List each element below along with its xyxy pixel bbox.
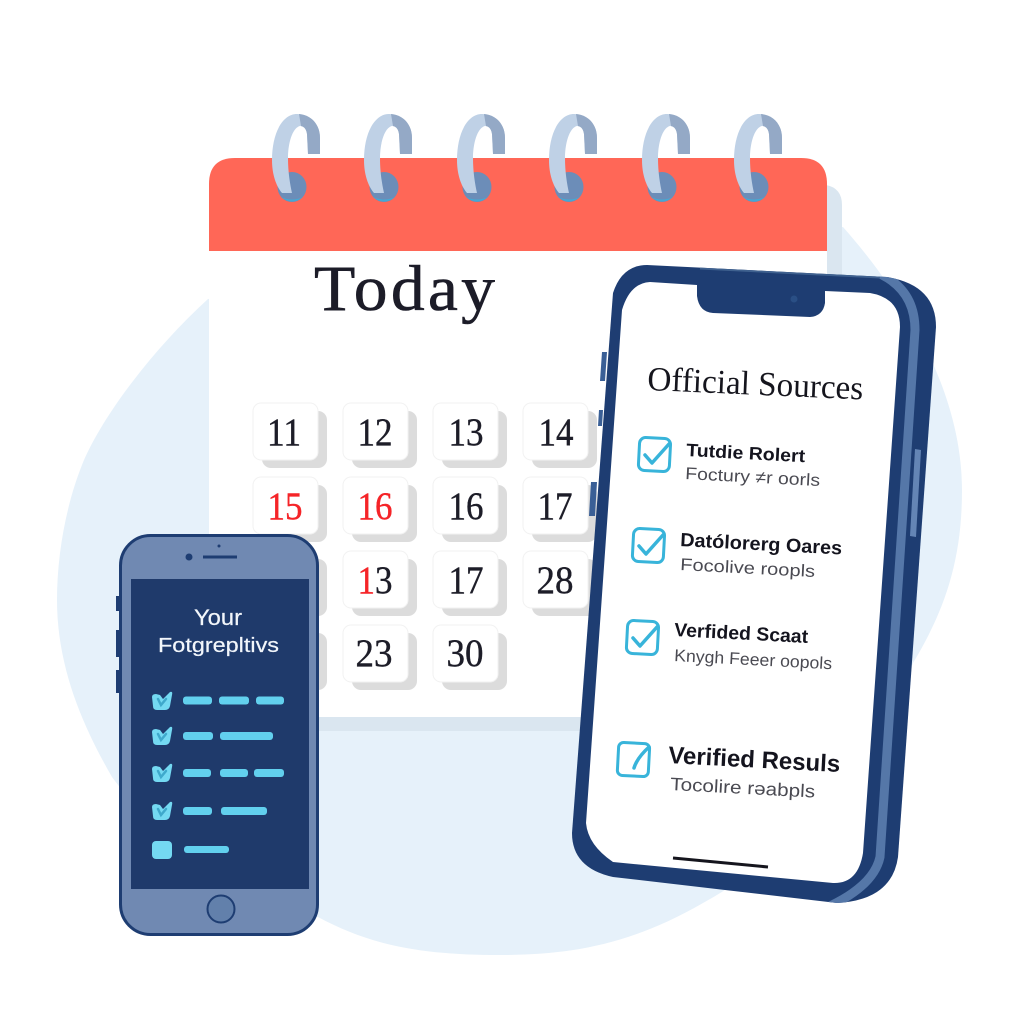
small phone heading bbox=[158, 605, 279, 657]
small phone heading: Fotgrepltivs bbox=[158, 635, 279, 657]
home indicator bbox=[673, 858, 768, 867]
calendar bbox=[209, 114, 842, 731]
calendar heading: Today bbox=[314, 253, 495, 325]
date grid: 16 bbox=[358, 485, 392, 528]
source item 2: Focolive roopls bbox=[680, 555, 816, 581]
date grid: 23 bbox=[356, 632, 392, 675]
small phone side buttons bbox=[116, 596, 119, 693]
phone screen bbox=[586, 282, 900, 883]
source item 2: Datólorerg Oares bbox=[680, 530, 843, 559]
source item 3: Knygh Feeer oopols bbox=[674, 646, 833, 673]
notch camera bbox=[790, 296, 798, 302]
date grid: 11 bbox=[267, 411, 301, 454]
small phone screen bbox=[131, 579, 309, 889]
date grid: 17 bbox=[538, 485, 572, 528]
source item 4: Verified Resuls bbox=[668, 742, 841, 778]
date grid: 28 bbox=[536, 559, 574, 602]
small phone bbox=[116, 536, 318, 934]
small phone speaker bbox=[186, 544, 237, 560]
small phone body bbox=[120, 536, 318, 934]
source item 1: Foctury ≠r oorls bbox=[685, 464, 821, 490]
phone side key bbox=[910, 449, 921, 537]
date grid: 12 bbox=[358, 411, 392, 454]
phone side buttons bbox=[589, 352, 607, 516]
date grid: 13 bbox=[448, 411, 484, 454]
date grid: 17 bbox=[448, 559, 484, 602]
date grid: 13 bbox=[358, 559, 392, 602]
small phone checklist bbox=[152, 692, 284, 859]
date grid: 30 bbox=[446, 632, 484, 675]
source item 4: Tocolire rəabpls bbox=[670, 774, 816, 802]
calendar shadow bbox=[300, 185, 842, 731]
small phone heading: Your bbox=[194, 605, 242, 630]
phone heading: Official Sources bbox=[647, 361, 864, 407]
source item 2 bbox=[632, 528, 843, 581]
date grid: 15 bbox=[268, 485, 302, 528]
date grid: 16 bbox=[448, 485, 484, 528]
small phone home button bbox=[208, 896, 234, 922]
source item 1: Tutdie Rolert bbox=[686, 440, 806, 466]
source item 1 bbox=[638, 437, 821, 490]
calendar page bbox=[209, 158, 827, 717]
background blob bbox=[57, 227, 962, 955]
source item 3: Verfided Scaat bbox=[674, 620, 809, 648]
phone body bbox=[572, 265, 936, 903]
date grid bbox=[253, 403, 597, 690]
spiral rings bbox=[272, 114, 782, 202]
source item 3 bbox=[626, 620, 833, 673]
source item 4 bbox=[617, 742, 841, 802]
large phone bbox=[572, 265, 936, 906]
phone edge highlight bbox=[700, 268, 915, 906]
calendar red header bbox=[209, 158, 827, 251]
date grid: 14 bbox=[538, 411, 574, 454]
